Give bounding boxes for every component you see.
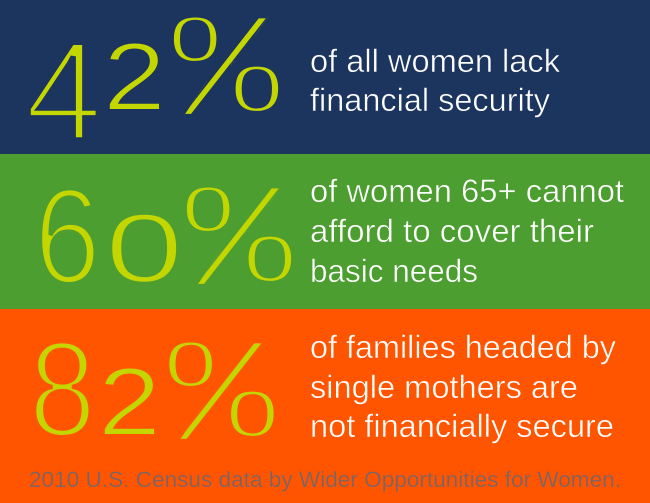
statistic: 82%: % — [146, 339, 282, 461]
statistic: 82% — [36, 341, 274, 441]
statistic: 42%: 4 — [25, 12, 102, 170]
description: 42 percent: financial security — [310, 82, 550, 118]
panel: 60 percent — [0, 154, 650, 317]
description: 82 percent: not financially secure — [310, 408, 614, 444]
statistic: 60%: 6 — [34, 161, 101, 313]
panel: 42 percent — [0, 0, 650, 170]
statistic: 82%: 8 — [29, 314, 96, 466]
statistic: 82%: % — [162, 318, 298, 438]
statistic: 82%: % — [144, 310, 297, 472]
statistic: 60%: % — [161, 155, 315, 317]
source note: 2010 U.S. Census data by Wider Opportunities for Women. — [29, 467, 621, 492]
statistic: 42% — [30, 16, 278, 138]
statistic: 60%: % — [179, 163, 315, 283]
description: 60 percent: of women 65+ cannot — [310, 173, 624, 209]
statistic: 60% — [42, 186, 292, 286]
statistic: 42%: % — [150, 14, 286, 136]
description: 82 percent: of families headed by — [310, 329, 616, 365]
description: 60 percent: basic needs — [310, 253, 478, 289]
description: 82 percent — [310, 329, 616, 444]
statistic: 42%: 2 — [103, 23, 166, 131]
statistic: 82%: 2 — [98, 348, 161, 456]
statistic: 60%: 0 — [105, 193, 183, 303]
statistic: 60%: % — [163, 184, 299, 306]
description: 60 percent — [310, 173, 624, 289]
panel: 82 percent — [0, 309, 650, 503]
description: 82 percent: single mothers are — [310, 369, 578, 405]
description: 42 percent — [310, 43, 561, 118]
description: 42 percent: of all women lack — [310, 43, 561, 79]
description: 60 percent: afford to cover their — [310, 213, 594, 249]
